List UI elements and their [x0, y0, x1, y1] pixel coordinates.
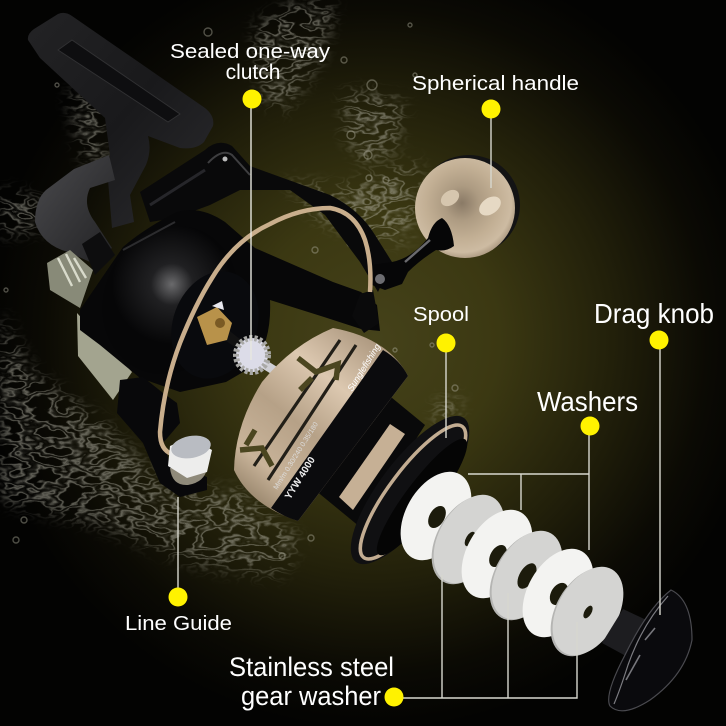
- flange gold ring: [345, 413, 481, 571]
- shaft with brass nut and gear: [197, 301, 282, 378]
- line roller arm: [117, 377, 207, 497]
- spool front flange: [332, 400, 488, 580]
- washer 6: [536, 554, 638, 669]
- washer 2: [417, 482, 519, 597]
- leader lines: [178, 109, 660, 698]
- label: sealed one-way clutch: clutch: [226, 61, 280, 84]
- label: drag knob: Drag knob: [594, 298, 714, 329]
- washer 1: [386, 459, 486, 573]
- handle ball highlights: [438, 187, 462, 209]
- handle stem: [372, 218, 454, 290]
- callout dot: handle: [482, 100, 500, 118]
- label: sealed one-way clutch: Sealed one-way: [170, 41, 330, 63]
- label: washers: Washers: [537, 386, 638, 417]
- spool line capacity text: Mm/m 0.30/240 0.35/180: [273, 421, 320, 491]
- label: stainless steel gear washer: gear washer: [241, 681, 381, 711]
- callout dot: line guide: [168, 588, 188, 606]
- drag adjuster knob rear: [47, 232, 115, 308]
- water splashes: [0, 0, 460, 575]
- clutch leader line: [250, 99, 252, 360]
- label: line guide: Line Guide: [125, 613, 232, 635]
- spool body: [234, 328, 408, 521]
- washer 4: [475, 518, 577, 633]
- rotor cup: [78, 203, 380, 397]
- gearbox back cover: [35, 155, 115, 262]
- spool brand text: Sunglefishing: [345, 342, 382, 393]
- label: spool: Spool: [413, 304, 469, 326]
- bail wire: [160, 208, 370, 454]
- spool waist: [315, 388, 425, 527]
- callout dot: washers: [580, 416, 600, 436]
- handle ball black rim: [418, 155, 520, 255]
- line guide roller: [168, 433, 213, 485]
- foot recessed slot: [58, 40, 180, 122]
- reel foot and stem: [28, 13, 213, 228]
- spherical handle: [372, 155, 520, 290]
- callout dot: spool: [436, 334, 456, 352]
- drag knob part: [602, 590, 692, 711]
- drag knob dome: [609, 590, 692, 711]
- bail tip: [352, 290, 379, 333]
- spool: [234, 328, 488, 580]
- side silver panel: [77, 313, 132, 400]
- flange inner opening: [366, 430, 478, 564]
- callout dot: clutch: [242, 90, 262, 108]
- spool logo marks: [240, 358, 338, 466]
- spool model text: YYW 4000: [283, 455, 318, 502]
- spool black band: [271, 350, 408, 521]
- washer 5: [508, 536, 608, 650]
- washer 3: [447, 497, 547, 611]
- callout dot: drag knob: [650, 330, 668, 350]
- handle ball: [415, 158, 515, 258]
- drag knob stem: [602, 609, 657, 662]
- callout dot: gear washer: [384, 688, 404, 706]
- label: stainless steel gear washer: Stainless steel: [229, 652, 394, 682]
- label: spherical handle: Spherical handle: [412, 72, 579, 95]
- upper rotor arm: [140, 143, 392, 292]
- washer discs: [386, 459, 638, 669]
